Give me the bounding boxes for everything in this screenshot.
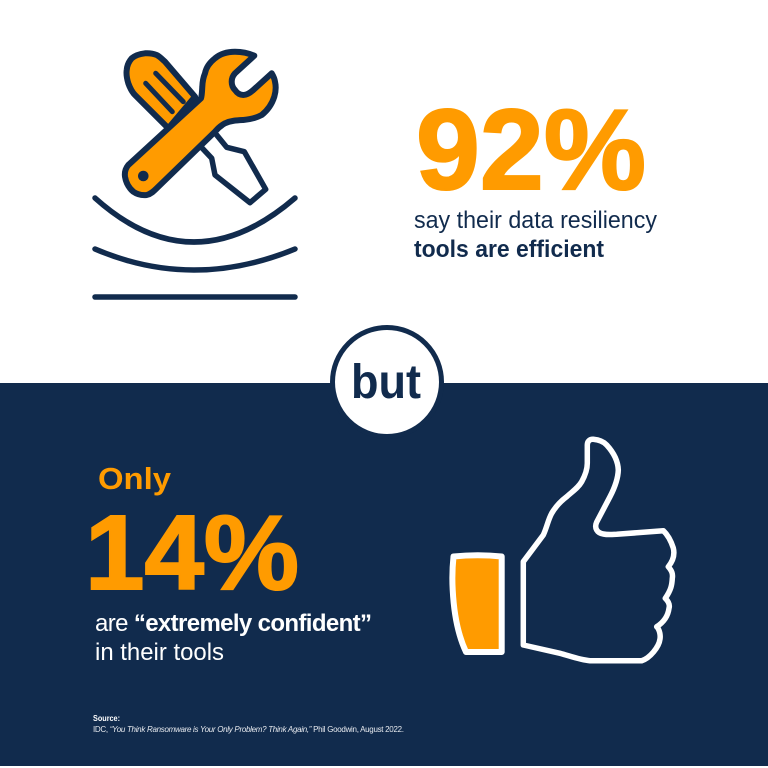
stat: 92%: 92% — [416, 87, 646, 214]
icon: thumb cuff — [452, 555, 502, 652]
text: Only: Only — [98, 461, 172, 496]
icon: thumbs up — [452, 439, 674, 661]
text: in their tools: in their tools — [95, 639, 224, 666]
badge word: but — [351, 356, 421, 409]
icon: curved line two — [95, 249, 295, 270]
icon: screwdriver shaft — [202, 135, 266, 203]
icon: straight line — [95, 294, 295, 300]
icon: curved line one — [95, 198, 295, 242]
panel: navy lower band — [0, 383, 768, 766]
icon: wrench hole — [138, 171, 149, 181]
badge: but — [332, 328, 442, 436]
icon: tools over curved lines — [95, 52, 295, 297]
text: say their data resiliency: say their data resiliency — [414, 207, 658, 234]
text: are extremely confident: are “extremely confident” — [95, 610, 372, 637]
source citation: IDC, “You Think Ransomware is Your Only Problem? Think Again,” Phil Goodwin, August 2022. — [93, 725, 404, 734]
icon: handle grooves — [146, 73, 183, 112]
text: source — [93, 714, 404, 734]
icon: screwdriver handle — [126, 53, 195, 128]
badge circle — [332, 328, 442, 436]
source label: Source: — [93, 714, 120, 723]
icon: hand outline — [523, 439, 674, 661]
icon: wrench — [125, 52, 276, 195]
stat: 14%: 14% — [85, 494, 299, 612]
text: tools are efficient: tools are efficient — [414, 236, 604, 263]
